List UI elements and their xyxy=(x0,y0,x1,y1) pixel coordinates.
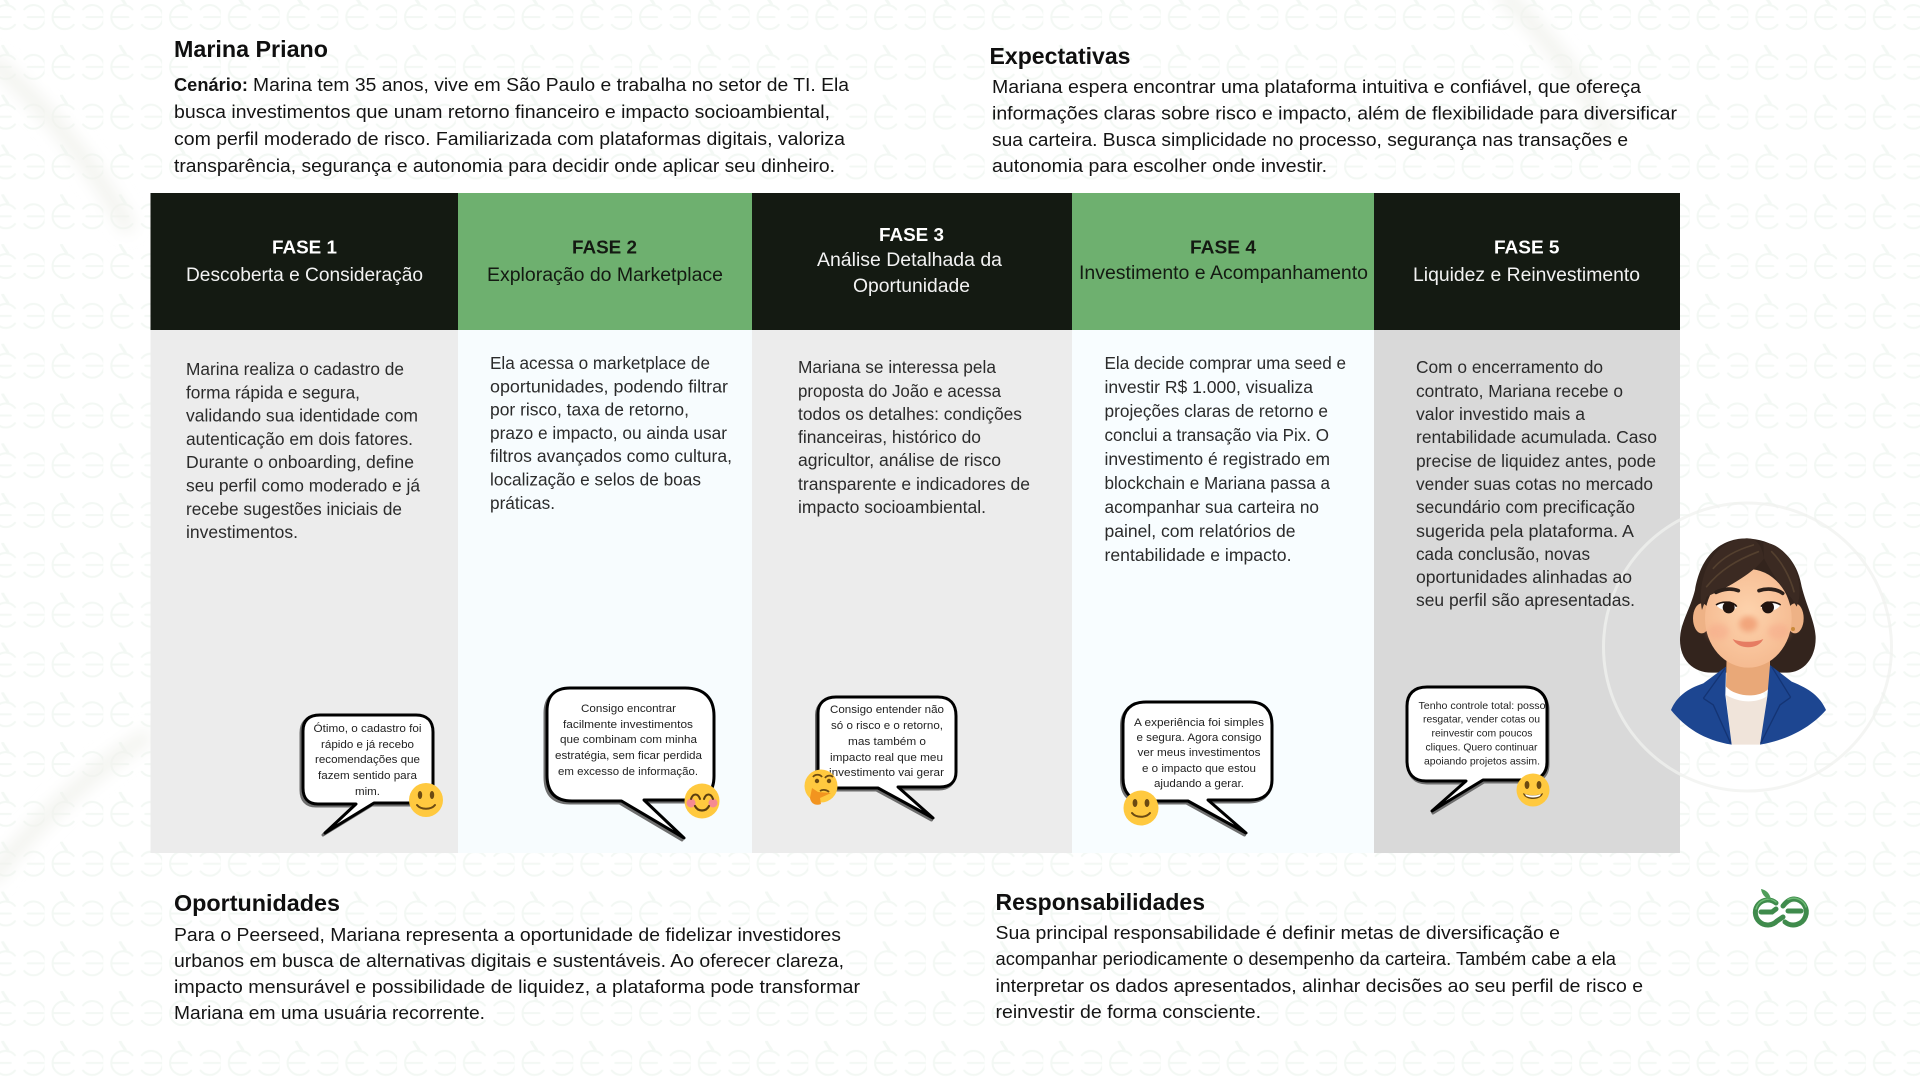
header: fase 3: FASE 3 xyxy=(879,224,944,245)
body text: fase 5: vender suas cotas no mercado xyxy=(1416,474,1653,494)
callout: fase 4 quote: e o impacto que estou xyxy=(1142,763,1256,775)
callout: fase 5 quote: apoiando projetos assim. xyxy=(1424,756,1540,768)
body text: fase 5: cada conclusão, novas xyxy=(1416,544,1590,564)
body text: fase 2: filtros avançados como cultura, xyxy=(490,446,732,466)
text block: scenario: Marina tem 35 anos, vive em São Paulo e trabalha no setor de TI. Ela xyxy=(253,74,850,95)
header: fase 1: FASE 1 xyxy=(272,236,337,258)
body text: fase 3: Mariana se interessa pela xyxy=(798,357,996,377)
callout: fase 1 quote: recomendações que xyxy=(315,754,420,766)
text block: expectations: sua carteira. Busca simplicidade no processo, segurança nas transações e xyxy=(992,129,1628,150)
body text: fase 5 xyxy=(1416,357,1657,610)
callout: fase 5 quote xyxy=(1407,687,1548,813)
header: fase 2 xyxy=(458,193,752,330)
body text: fase 4: painel, com relatórios de xyxy=(1104,521,1296,541)
icon: thinking emoji xyxy=(804,770,838,805)
text block: scenario: transparência, segurança e autonomia para decidir onde aplicar seu dinheiro. xyxy=(174,155,835,176)
body text: fase 2: Ela acessa o marketplace de xyxy=(490,353,710,373)
body text: fase 5: oportunidades alinhadas ao xyxy=(1416,567,1632,587)
text block: responsibilities: interpretar os dados apresentados, alinhar decisões ao seu perfil de risco e xyxy=(996,975,1643,996)
text block: expectations: Mariana espera encontrar uma plataforma intuitiva e confiável, que ofereça xyxy=(992,76,1642,97)
callout: fase 5 quote: Tenho controle total: posso xyxy=(1418,701,1546,712)
header: fase 5 xyxy=(1374,193,1680,330)
callout: fase 2 quote: estratégia, sem ficar perdida xyxy=(555,750,703,762)
body text: fase 5: rentabilidade acumulada. Caso xyxy=(1416,427,1657,447)
callout: fase 4 quote: ver meus investimentos xyxy=(1138,747,1261,759)
icon: Peerseed logo xyxy=(1755,889,1806,925)
panel: fase 1 xyxy=(150,193,458,853)
body text: fase 4: investimento é registrado em xyxy=(1104,449,1330,469)
panel: fase 3 xyxy=(752,193,1072,853)
text block: opportunities: Para o Peerseed, Mariana representa a oportunidade de fidelizar investidores xyxy=(174,924,841,945)
body text: fase 1: recebe sugestões iniciais de xyxy=(186,499,402,519)
callout: fase 3 quote: só o risco e o retorno, xyxy=(831,720,943,732)
body text: fase 5: secundário com precificação xyxy=(1416,497,1635,517)
text block: opportunities xyxy=(174,924,860,1023)
body text: fase 2: localização e selos de boas xyxy=(490,470,701,490)
text block: scenario xyxy=(174,74,850,176)
callout: fase 3 quote: impacto real que meu xyxy=(830,752,943,764)
icon: smiling emoji 1 xyxy=(409,783,443,817)
body text: fase 1: Marina realiza o cadastro de xyxy=(186,359,404,379)
heading: Oportunidades: Oportunidades xyxy=(174,890,340,916)
body text: fase 5: Com o encerramento do xyxy=(1416,357,1603,377)
body text: fase 4: blockchain e Mariana passa a xyxy=(1104,473,1330,493)
callout: fase 2 quote: facilmente investimentos xyxy=(563,719,693,731)
text block: scenario: Cenário: xyxy=(174,74,248,95)
callout: fase 3 quote xyxy=(816,697,956,820)
body text: fase 3: agricultor, análise de risco xyxy=(798,450,1001,470)
body text: fase 4: projeções claras de retorno e xyxy=(1104,401,1328,421)
header: fase 2: Exploração do Marketplace xyxy=(487,265,723,286)
body text: fase 3: impacto socioambiental. xyxy=(798,497,986,517)
body text: fase 1: validando sua identidade com xyxy=(186,406,418,426)
body text: fase 3 xyxy=(798,357,1030,517)
panel: fase 5 xyxy=(1374,193,1892,853)
callout: fase 1 quote: rápido e já recebo xyxy=(321,739,414,751)
body text: fase 3: financeiras, histórico do xyxy=(798,427,981,447)
callout: fase 1 quote: mim. xyxy=(355,786,380,798)
persona heading: Marina Priano: Marina Priano xyxy=(174,36,328,62)
text block: opportunities: urbanos em busca de alternativas digitais e sustentáveis. Ao oferecer clareza, xyxy=(174,950,844,971)
body text: fase 5: precise de liquidez antes, pode xyxy=(1416,451,1656,471)
header: fase 4: Investimento e Acompanhamento xyxy=(1079,263,1368,284)
callout: fase 2 quote: em excesso de informação. xyxy=(558,766,698,778)
body text: fase 4: Ela decide comprar uma seed e xyxy=(1104,353,1346,373)
callout: fase 3 quote: Consigo entender não xyxy=(830,704,944,716)
body text: fase 5: seu perfil são apresentadas. xyxy=(1416,590,1635,610)
header: fase 1 xyxy=(150,193,458,330)
body text: fase 4: rentabilidade e impacto. xyxy=(1104,545,1292,565)
callout: fase 1 quote: Ótimo, o cadastro foi xyxy=(314,722,422,735)
callout: fase 2 quote xyxy=(545,688,714,840)
icon: smiling emoji 4 xyxy=(1124,790,1158,826)
body text: fase 3: todos os detalhes: condições xyxy=(798,404,1022,424)
callout: fase 5 quote: cliques. Quero continuar xyxy=(1426,742,1538,754)
body text: fase 2: por risco, taxa de retorno, xyxy=(490,400,689,420)
header: fase 5: FASE 5 xyxy=(1494,236,1560,258)
header: fase 2: FASE 2 xyxy=(572,236,637,258)
callout: fase 4 quote: e segura. Agora consigo xyxy=(1136,732,1262,744)
body text: fase 5: sugerida pela plataforma. A xyxy=(1416,521,1635,541)
body text: fase 2 xyxy=(490,353,732,513)
icon: grinning emoji xyxy=(1516,774,1550,806)
text block: expectations: autonomia para escolher onde investir. xyxy=(992,155,1327,176)
body text: fase 1: forma rápida e segura, xyxy=(186,382,360,402)
text block: responsibilities: acompanhar periodicamente o desempenho da carteira. Também cabe a ela xyxy=(996,948,1617,969)
text block: expectations: informações claras sobre risco e impacto, além de flexibilidade para diversificar xyxy=(992,102,1677,124)
body text: fase 1: autenticação em dois fatores. xyxy=(186,429,413,449)
callout: fase 5 quote: resgatar, vender cotas ou xyxy=(1423,714,1540,726)
callout: fase 5 quote: reinvestir com poucos xyxy=(1432,728,1532,740)
callout: fase 4 quote xyxy=(1122,702,1272,835)
body text: fase 2: prazo e impacto, ou ainda usar xyxy=(490,423,727,443)
persona avatar xyxy=(1671,538,1826,745)
header: fase 4: FASE 4 xyxy=(1190,236,1257,258)
body text: fase 5: valor investido mais a xyxy=(1416,404,1585,424)
callout: fase 4 quote: A experiência foi simples xyxy=(1134,717,1264,729)
text block: responsibilities: Sua principal responsabilidade é definir metas de diversificação e xyxy=(996,922,1560,943)
body text: fase 1: investimentos. xyxy=(186,522,298,542)
header: fase 4 xyxy=(1072,193,1374,330)
body text: fase 2: práticas. xyxy=(490,493,555,513)
text block: responsibilities: reinvestir de forma consciente. xyxy=(996,1001,1261,1022)
header: fase 3: Análise Detalhada da xyxy=(817,250,1002,271)
text block: scenario: com perfil moderado de risco. Familiarizada com plataformas digitais, valoriza xyxy=(174,128,846,149)
text block: scenario: busca investimentos que unam retorno financeiro e impacto socioambiental, xyxy=(174,101,830,122)
callout: fase 1 quote: fazem sentido para xyxy=(318,770,418,782)
heading: Responsabilidades: Responsabilidades xyxy=(996,889,1205,915)
callout: fase 4 quote: ajudando a gerar. xyxy=(1154,778,1244,790)
body text: fase 1: Durante o onboarding, define xyxy=(186,452,414,472)
callout: fase 1 quote xyxy=(301,715,433,835)
body text: fase 4: investir R$ 1.000, visualiza xyxy=(1104,377,1313,397)
header: fase 3 xyxy=(752,193,1072,330)
avatar ring xyxy=(1604,503,1892,791)
icon: blushing emoji xyxy=(684,784,720,818)
panel: fase 4 xyxy=(1072,193,1374,853)
text block: opportunities: Mariana em uma usuária recorrente. xyxy=(174,1002,485,1023)
text block: opportunities: impacto mensurável e possibilidade de liquidez, a plataforma pode transformar xyxy=(174,976,860,997)
text block: expectations xyxy=(992,76,1677,176)
header: fase 5: Liquidez e Reinvestimento xyxy=(1413,265,1640,286)
header: fase 3: Oportunidade xyxy=(853,276,970,297)
body text: fase 3: transparente e indicadores de xyxy=(798,474,1030,494)
text block: responsibilities xyxy=(996,922,1643,1022)
heading: Expectativas: Expectativas xyxy=(990,43,1130,69)
callout: fase 2 quote: Consigo encontrar xyxy=(581,703,676,715)
body text: fase 1 xyxy=(186,359,420,542)
body text: fase 5: contrato, Mariana recebe o xyxy=(1416,381,1623,401)
header: fase 1: Descoberta e Consideração xyxy=(186,265,423,286)
body text: fase 2: oportunidades, podendo filtrar xyxy=(490,376,728,396)
body text: fase 4 xyxy=(1104,353,1346,565)
body text: fase 3: proposta do João e acessa xyxy=(798,381,1001,401)
callout: fase 3 quote: mas também o xyxy=(848,736,926,748)
body text: fase 4: acompanhar sua carteira no xyxy=(1104,497,1319,517)
body text: fase 4: conclui a transação via Pix. O xyxy=(1104,425,1329,445)
panel: fase 2 xyxy=(458,193,752,853)
body text: fase 1: seu perfil como moderado e já xyxy=(186,476,420,496)
callout: fase 3 quote: investimento vai gerar xyxy=(829,767,944,779)
callout: fase 2 quote: que combinam com minha xyxy=(560,734,698,746)
